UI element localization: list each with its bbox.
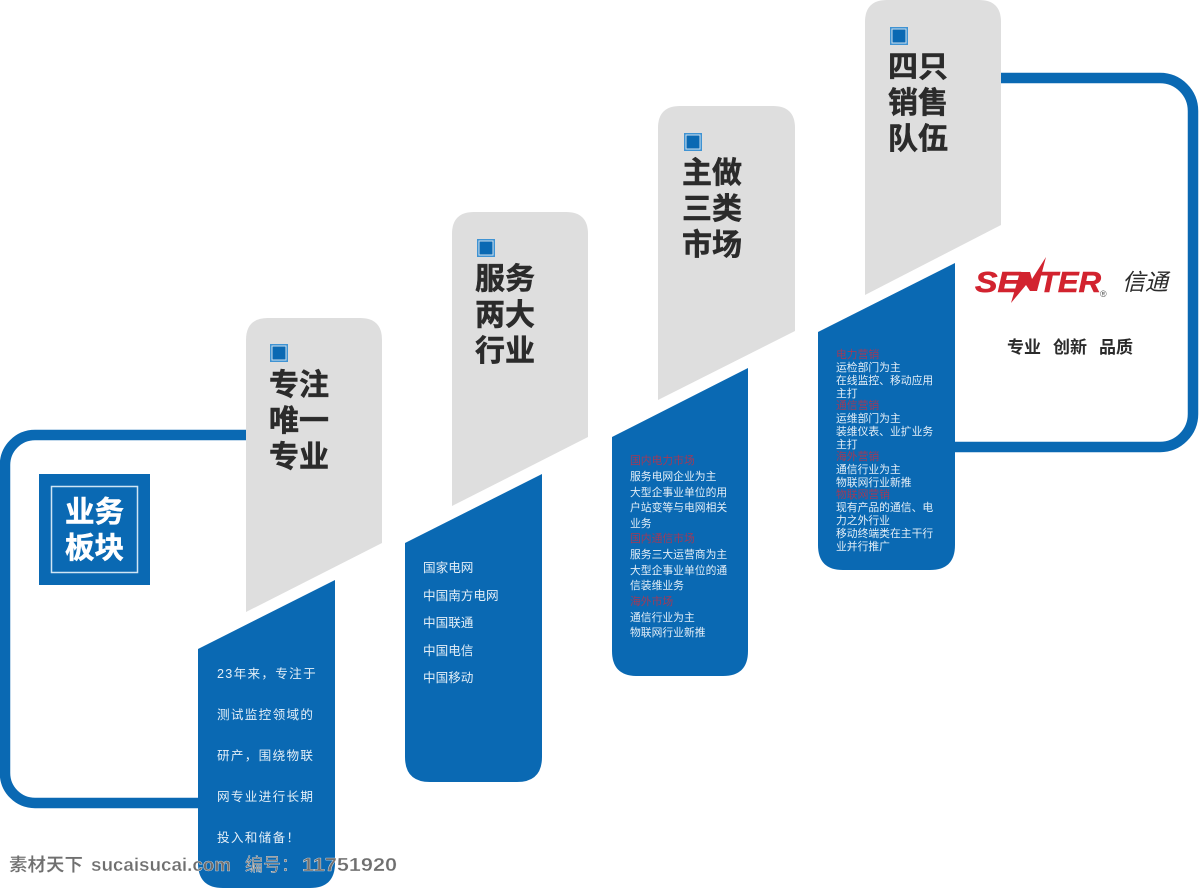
text: step 2 list: 国家电网 — [423, 560, 473, 575]
text: step 4 body: 海外营销 — [836, 449, 879, 463]
panel: step 3 gray heading — [658, 106, 795, 400]
panel: step 4 gray heading — [865, 0, 1001, 295]
text: step 2 list — [423, 560, 499, 685]
text: step 1 body: 测试监控领域的 — [217, 707, 314, 722]
text: step 1 body: 研产，围绕物联 — [217, 749, 314, 763]
text: step 4 body: 主打 — [836, 386, 858, 400]
badge: 业务板块 — [39, 474, 150, 585]
frame: right outline — [955, 78, 1193, 447]
text: step 4 body: 主打 — [836, 437, 858, 451]
text: step 3 body: 通信行业为主 — [630, 611, 695, 624]
text: step 1 body: 23年来，专注于 — [217, 667, 317, 681]
heading: 主做三类市场: 主做 — [682, 157, 742, 190]
badge: 业务板块: 业务 — [65, 496, 124, 529]
text: step 3 body: 海外市场 — [630, 594, 673, 608]
text: step 4 body: 力之外行业 — [836, 513, 890, 527]
heading: 专注唯一专业: 专注 — [269, 369, 329, 402]
logo: SENTER 信通 — [975, 257, 1171, 303]
heading: 四只销售队伍: 队伍 — [888, 123, 948, 156]
heading: 四只销售队伍: 四只 — [888, 51, 948, 84]
text: step 3 body: 物联网行业新推 — [630, 625, 706, 639]
text: step 1 body — [217, 667, 317, 845]
text: step 3 body: 信装维业务 — [630, 579, 684, 592]
icon: square bullet 3 — [684, 133, 702, 151]
text: step 2 list: 中国移动 — [423, 671, 473, 685]
watermark: 11751920 — [302, 855, 397, 875]
text: step 4 body: 通信行业为主 — [836, 463, 901, 476]
text: step 3 body: 大型企事业单位的通 — [630, 563, 727, 577]
panel: step 3 blue text — [612, 368, 748, 676]
badge: 业务板块: 板块 — [65, 532, 124, 565]
text: step 4 body: 在线监控、移动应用 — [836, 373, 933, 387]
watermark: 编号： — [245, 855, 299, 875]
text: step 3 body: 服务三大运营商为主 — [630, 547, 727, 561]
text: step 3 body: 大型企事业单位的用 — [630, 485, 727, 499]
panel: step 1 gray heading — [246, 318, 382, 612]
text: step 4 body: 装维仪表、业扩业务 — [836, 424, 933, 438]
text: step 4 body: 物联网营销 — [836, 487, 890, 501]
panel: step 2 gray heading — [452, 212, 588, 506]
text: step 1 body: 投入和储备！ — [217, 831, 300, 845]
text: step 4 body: 移动终端类在主干行 — [836, 526, 933, 540]
text: step 3 body: 业务 — [630, 517, 652, 530]
logo: SENTER 信通: SE — [975, 267, 1022, 299]
watermark: 素材天下 — [9, 855, 83, 875]
text: step 3 body: 国内通信市场 — [630, 531, 695, 545]
text: step 4 body: 物联网行业新推 — [836, 475, 912, 489]
text: step 3 body: 国内电力市场 — [630, 453, 695, 467]
slogan: 创新 — [1053, 337, 1087, 357]
frame: left outline — [5, 435, 246, 803]
heading: 主做三类市场: 市场 — [682, 229, 742, 262]
heading: 服务两大行业 — [475, 263, 535, 368]
text: step 4 body: 运检部门为主 — [836, 360, 901, 374]
text: step 2 list: 中国联通 — [423, 616, 474, 630]
logo: SENTER 信通: 信通 — [1122, 269, 1171, 295]
watermark: sucaisucai.com — [91, 855, 231, 875]
heading: 主做三类市场: 三类 — [682, 193, 742, 226]
text: step 2 list: 中国南方电网 — [423, 588, 499, 603]
text: step 1 body: 网专业进行长期 — [217, 790, 314, 804]
panel: step 1 blue text — [198, 580, 335, 888]
heading: 四只销售队伍: 销售 — [888, 87, 948, 120]
slogan: 品质 — [1099, 337, 1133, 357]
slogan — [1007, 337, 1133, 357]
text: step 4 body — [836, 347, 933, 553]
heading: 主做三类市场 — [682, 157, 742, 262]
text: step 4 body: 通信营销 — [836, 398, 879, 412]
text: step 4 body: 电力营销 — [836, 347, 879, 361]
logo: SENTER 信通: TER — [1039, 267, 1101, 299]
heading: 四只销售队伍 — [888, 51, 948, 156]
text: step 3 body: 服务电网企业为主 — [630, 469, 717, 483]
text: step 2 list: 中国电信 — [423, 644, 473, 658]
text: step 4 body: 运维部门为主 — [836, 411, 901, 425]
text: step 3 body — [630, 453, 727, 639]
heading: 服务两大行业: 两大 — [475, 299, 535, 332]
text: step 4 body: 现有产品的通信、电 — [836, 500, 933, 514]
heading: 专注唯一专业 — [269, 369, 329, 474]
panel: step 2 blue text — [405, 474, 542, 782]
logo: SENTER 信通: ® — [1100, 289, 1107, 299]
text: step 4 body: 业并行推广 — [836, 539, 890, 553]
icon: square bullet 1 — [270, 344, 288, 362]
watermark — [9, 855, 397, 875]
icon: square bullet 4 — [890, 27, 908, 45]
text: step 3 body: 户站变等与电网相关 — [630, 500, 727, 514]
heading: 服务两大行业: 行业 — [475, 335, 535, 368]
slogan: 专业 — [1007, 338, 1041, 357]
icon: square bullet 2 — [477, 239, 495, 257]
heading: 服务两大行业: 服务 — [475, 263, 535, 296]
heading: 专注唯一专业: 唯一 — [269, 405, 329, 438]
panel: step 4 blue text — [818, 263, 955, 570]
heading: 专注唯一专业: 专业 — [269, 441, 329, 474]
